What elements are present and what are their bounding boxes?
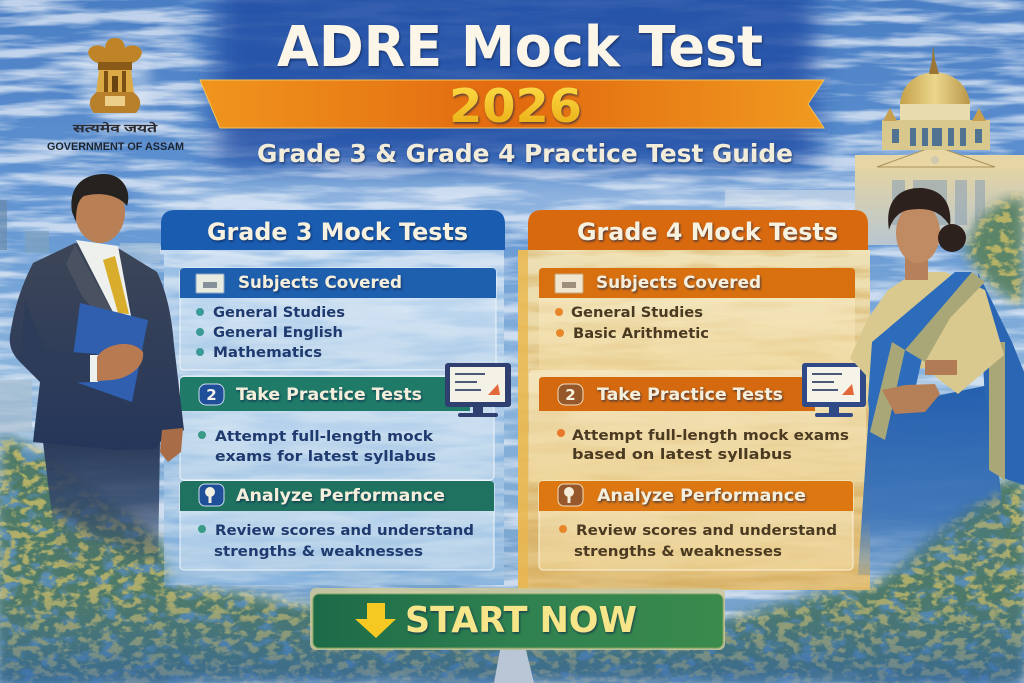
- card: take practice tests: [529, 370, 866, 482]
- far right drape: [978, 273, 1024, 485]
- card: analyze performance: Review scores and understand: [576, 523, 837, 539]
- head: [896, 203, 940, 263]
- panel: Grade 4 mock tests: [518, 210, 870, 590]
- panel heading: Grade 3 Mock Tests: [207, 218, 468, 246]
- foreground foliage: [0, 480, 1024, 683]
- hair bun: [938, 224, 966, 252]
- card: analyze performance: strengths & weaknesses: [574, 544, 782, 560]
- hands: [97, 344, 143, 381]
- start now button: [310, 588, 725, 650]
- card: take practice tests: Take Practice Tests: [236, 385, 422, 405]
- card: subjects covered: Basic Arithmetic: [573, 326, 709, 342]
- year ribbon: [200, 79, 824, 133]
- subtitle: Grade 3 & Grade 4 Practice Test Guide: [257, 139, 793, 168]
- forearm: [20, 300, 97, 383]
- year ribbon: 2026: [449, 79, 582, 133]
- icon: magnifier: [199, 484, 224, 506]
- illustration: man in suit: [10, 174, 184, 565]
- panel heading: Grade 4 Mock Tests: [577, 218, 838, 246]
- hands: [882, 384, 940, 414]
- panel body: [518, 250, 870, 590]
- card: take practice tests: exams for latest syllabus: [215, 449, 436, 465]
- right tan border: [989, 342, 1005, 480]
- card: analyze performance: [539, 481, 853, 570]
- card: subjects covered: [539, 268, 855, 370]
- card: take practice tests: Take Practice Tests: [597, 385, 783, 405]
- card: subjects covered: Subjects Covered: [596, 273, 761, 293]
- icon: monitor: [802, 363, 866, 417]
- government label: GOVERNMENT OF ASSAM: [47, 141, 184, 153]
- card: take practice tests: based on latest syllabus: [572, 447, 792, 463]
- folder: [70, 303, 148, 402]
- card: analyze performance: Analyze Performance: [236, 486, 445, 506]
- icon: magnifier: [558, 484, 583, 506]
- card: take practice tests: Attempt full-length mock exams: [572, 428, 849, 444]
- panel: Grade 3 mock tests: [161, 210, 511, 585]
- icon: number 2: [199, 384, 224, 405]
- background: forest: [0, 430, 1024, 683]
- icon: monitor: [445, 363, 511, 417]
- card: subjects covered: [180, 268, 496, 370]
- emblem motto: सत्यमेव जयते: [71, 121, 158, 135]
- illustration: woman in saree: [850, 188, 1024, 575]
- icon: number 2: [558, 384, 583, 405]
- card: subjects covered: Mathematics: [213, 345, 322, 361]
- trousers: [43, 442, 160, 565]
- midriff: [925, 360, 957, 375]
- card: analyze performance: [180, 481, 494, 570]
- start now button: START NOW: [405, 600, 637, 641]
- building: [725, 45, 1024, 245]
- card: subjects covered: General English: [213, 325, 343, 341]
- panel header: [528, 210, 868, 250]
- head: [75, 181, 125, 243]
- emblem: [79, 36, 151, 120]
- icon: down arrow: [355, 603, 396, 638]
- card: subjects covered: General Studies: [571, 305, 703, 321]
- shirt and tie: [76, 240, 131, 316]
- skirt: [858, 385, 1010, 575]
- background: distant city: [0, 200, 160, 432]
- blouse: [850, 272, 1004, 394]
- title: ADRE Mock Test: [277, 15, 763, 80]
- card: subjects covered: Subjects Covered: [238, 273, 402, 293]
- icon: calendar: [555, 274, 583, 293]
- card: take practice tests: [180, 376, 494, 480]
- neck: [905, 248, 928, 280]
- saree pallu: [868, 272, 972, 440]
- card: analyze performance: Review scores and understand: [215, 523, 474, 539]
- card: subjects covered: General Studies: [213, 305, 345, 321]
- background: trees beside building: [958, 190, 1024, 310]
- icon: number 2: 2: [565, 386, 576, 404]
- panel body: [164, 245, 504, 585]
- icon: number 2: 2: [206, 386, 217, 404]
- lapels: [66, 245, 116, 335]
- panel header: [161, 210, 505, 250]
- card: take practice tests: Attempt full-length mock: [215, 429, 433, 445]
- icon: calendar: [196, 274, 224, 293]
- card: analyze performance: Analyze Performance: [597, 486, 806, 506]
- jacket: [10, 243, 184, 450]
- card: analyze performance: strengths & weaknesses: [214, 544, 423, 560]
